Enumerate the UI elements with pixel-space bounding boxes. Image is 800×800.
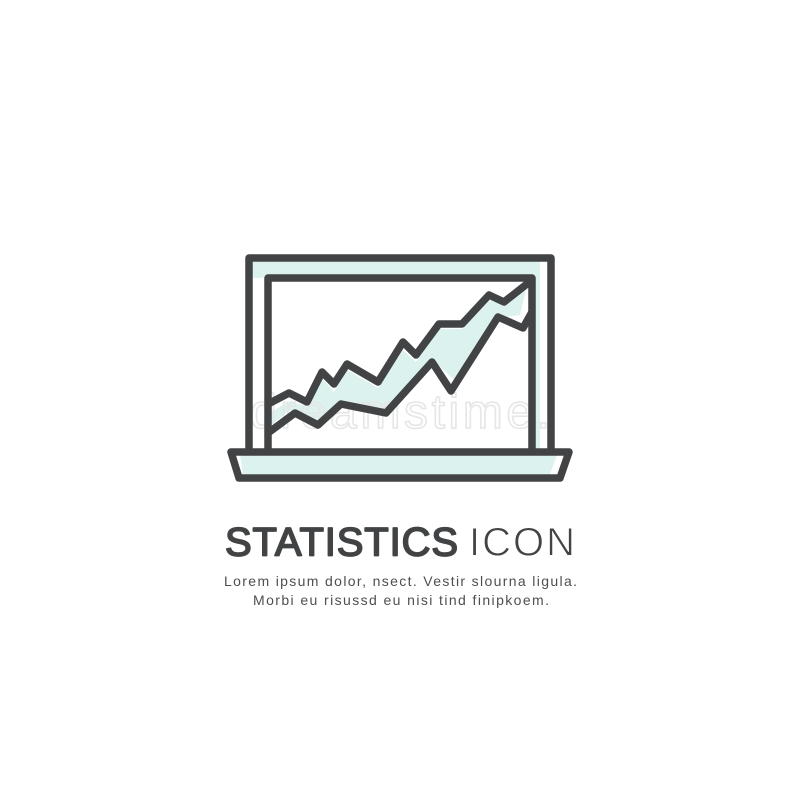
watermark: dreamstime.	[250, 386, 550, 439]
laptop base	[231, 452, 569, 478]
icon: laptop with statistics chart	[231, 258, 569, 478]
description text	[224, 573, 577, 608]
chart area mint fill	[271, 290, 526, 425]
lower chart line	[268, 312, 532, 433]
inner screen frame	[268, 278, 532, 452]
screen bezel mint fill	[252, 261, 540, 450]
title bold word: STATISTICS	[225, 520, 458, 564]
outer screen frame	[249, 258, 551, 452]
title light word: ICON	[469, 520, 575, 564]
description line 2: Morbi eu risussd eu nisi tind finipkoem.	[253, 592, 549, 608]
description line 1: Lorem ipsum dolor, nsect. Vestir slourna ligula.	[224, 573, 577, 589]
title	[225, 520, 575, 564]
upper chart line	[268, 280, 532, 404]
base mint fill	[240, 455, 557, 474]
